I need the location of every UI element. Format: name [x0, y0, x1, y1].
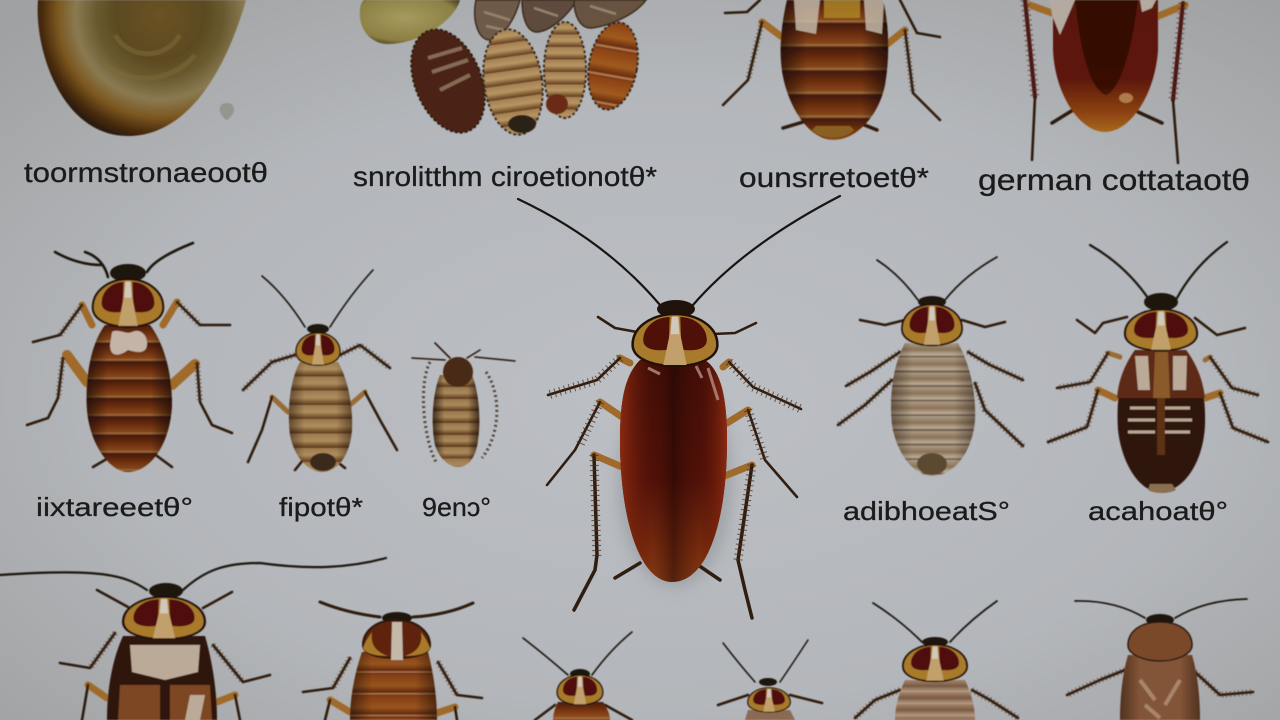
label: row 2 left: iixtareeetθ°	[36, 492, 193, 522]
olive egg	[360, 0, 460, 44]
label: top left ootheca: toormstronaeootθ	[24, 157, 268, 188]
icon: pale adult, row 2 right	[838, 257, 1023, 476]
pronotum	[633, 314, 717, 366]
icon: long-antenna roach, bottom left	[0, 558, 386, 720]
palps	[598, 317, 637, 332]
icon: small roach, bottom row	[523, 632, 632, 720]
top row of nymph casings	[475, 0, 520, 40]
icon: german cockroach, top right	[1025, 0, 1185, 163]
head	[657, 300, 695, 318]
icon: large ootheca egg case	[38, 0, 246, 136]
brown nymph casing	[582, 19, 644, 113]
label: row 2 pale adult: adibhoeatS°	[843, 496, 1010, 526]
legs	[620, 358, 630, 363]
label: row 2 dark adult: acahoatθ°	[1088, 496, 1228, 526]
dark nymph casing	[397, 19, 499, 143]
label: german cockroach: german cottataotθ	[978, 164, 1250, 197]
icon: small pale nymph, row 2	[412, 343, 515, 467]
icon: dark striped adult, row 2 far right	[1048, 242, 1268, 493]
antennae	[518, 199, 660, 305]
icon: roach, bottom row right	[855, 601, 1018, 720]
icon: striped roach, top centre	[723, 0, 940, 140]
tan nymph casing	[544, 22, 586, 118]
soft shadow	[617, 372, 733, 588]
icon: orange roach, bottom row	[303, 602, 482, 720]
cerci	[615, 563, 640, 578]
label: row 2 small nymph: 9enↄ°	[422, 492, 491, 522]
label: nymph cluster: snrolitthm ciroetionotθ*	[353, 161, 657, 192]
icon: medium nymph, row 2	[243, 270, 397, 472]
icon: large american cockroach, centre	[518, 196, 840, 618]
label: striped roach: ounsrretoetθ*	[739, 162, 929, 193]
icon: tan roach, bottom right	[1067, 599, 1253, 720]
label: row 2 medium nymph: fipotθ*	[279, 492, 363, 522]
icon: egg and nymph cluster	[360, 0, 646, 143]
pale nymph casing	[477, 25, 549, 139]
icon: adult roach, row 2 left	[27, 243, 232, 472]
wings	[620, 356, 727, 582]
icon: smallest roach, bottom row	[718, 640, 822, 720]
